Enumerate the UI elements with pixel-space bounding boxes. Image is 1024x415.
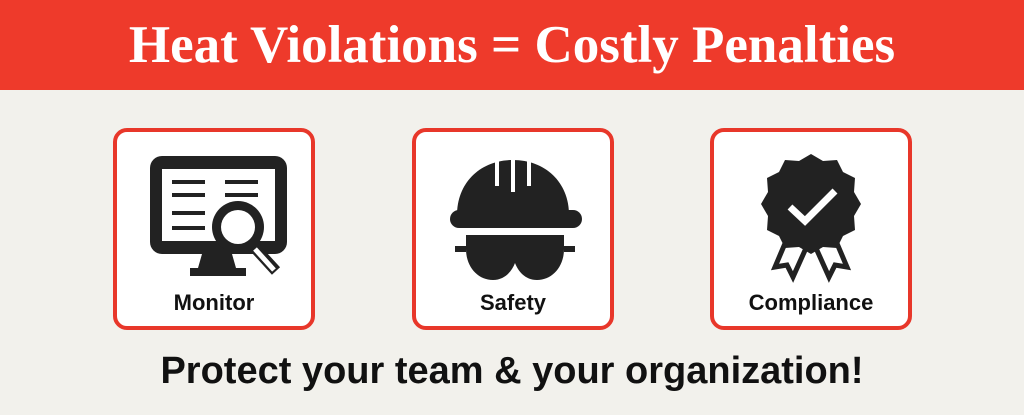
panel: compliance [710,128,912,330]
icon: monitor [150,156,287,276]
icon: seal with check [761,154,861,283]
label: Monitor: Monitor [174,290,254,315]
label: Safety: Safety [480,290,546,315]
label: Compliance: Compliance [749,290,873,315]
icon: hard hat [450,160,582,280]
title: Heat Violations = Costly Penalties [129,16,895,74]
title [0,0,1024,90]
footer slogan: Protect your team & your organization! [160,350,864,392]
panel: monitor [113,128,315,330]
panel: safety [412,128,614,330]
